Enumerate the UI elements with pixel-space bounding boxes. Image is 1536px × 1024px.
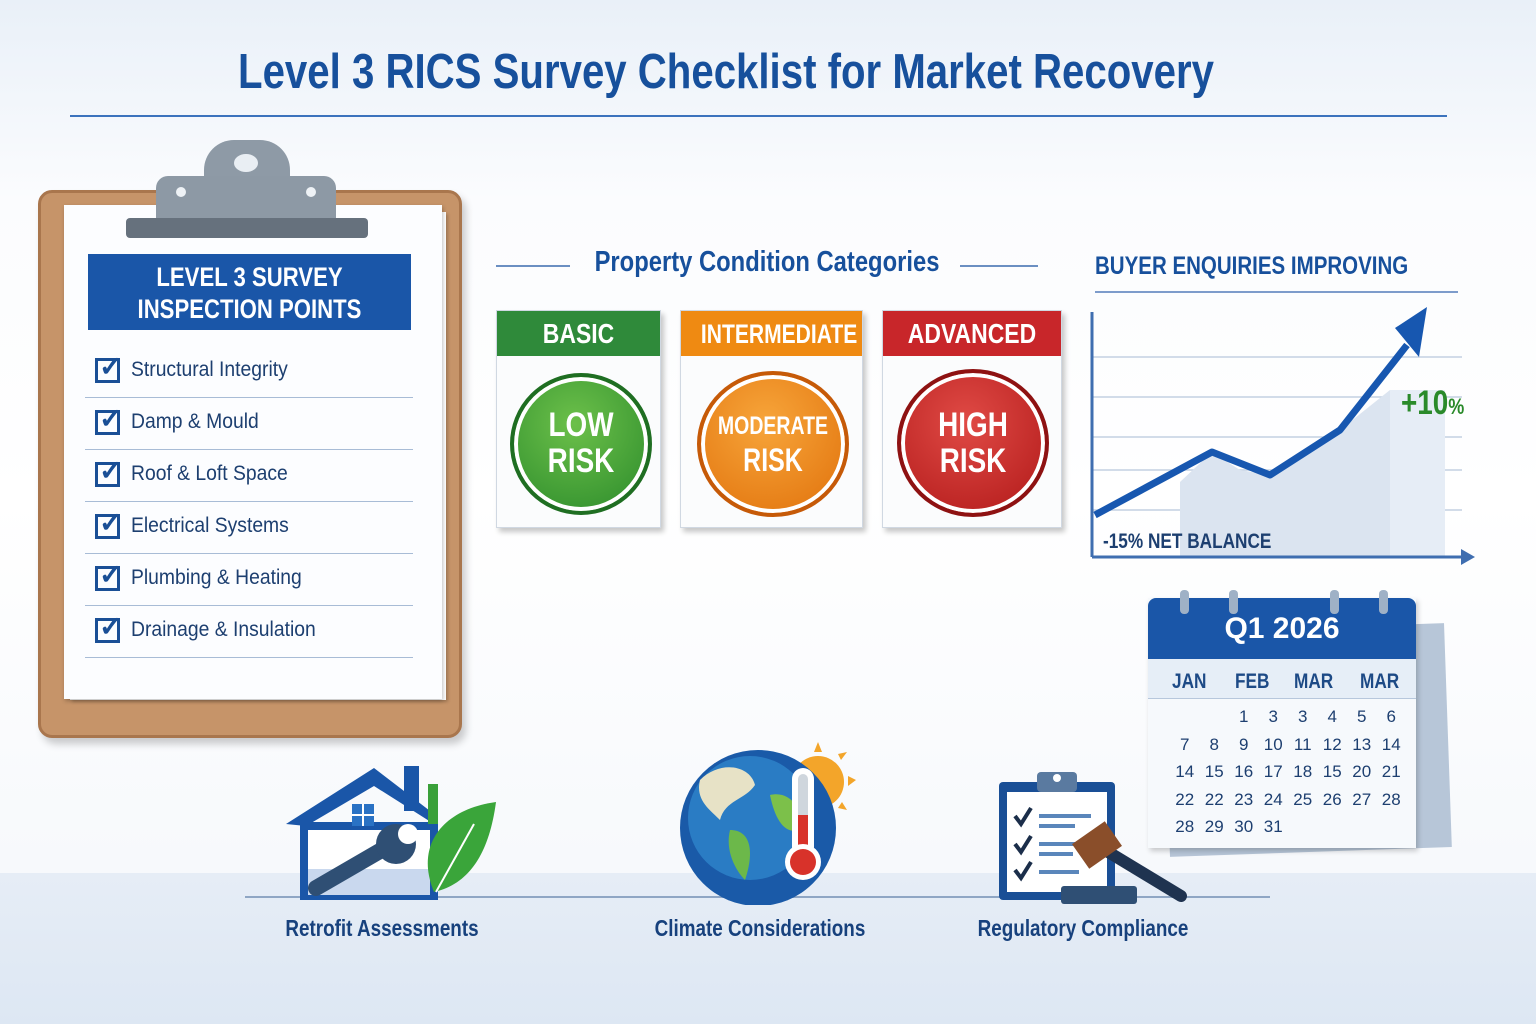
calendar: Q1 2026: 16: [1234, 762, 1253, 781]
calendar: Q1 2026: 7: [1180, 734, 1189, 754]
calendar: Q1 2026: 14: [1382, 734, 1401, 754]
label: regulatory compliance: Regulatory Compliance: [978, 915, 1188, 941]
calendar: Q1 2026: 9: [1239, 734, 1248, 754]
card: advanced high risk: HIGH: [938, 406, 1008, 444]
label: climate considerations: Climate Considerations: [655, 915, 865, 941]
label: net balance: -15% NET BALANCE: [1103, 530, 1271, 553]
calendar: Q1 2026: 22: [1205, 790, 1224, 808]
icon: climate globe: [680, 742, 856, 905]
card: intermediate moderate risk: [680, 310, 863, 528]
calendar: Q1 2026: 27: [1352, 790, 1371, 808]
card: advanced high risk: ADVANCED: [908, 318, 1036, 349]
card: advanced high risk: [882, 310, 1062, 528]
card: intermediate moderate risk: RISK: [743, 442, 803, 478]
calendar: Q1 2026: 28: [1382, 790, 1401, 808]
calendar: Q1 2026: 24: [1264, 790, 1283, 808]
calendar: Q1 2026: 20: [1352, 762, 1371, 781]
list: checklist items: ✓: [99, 351, 122, 382]
calendar: Q1 2026: 5: [1357, 707, 1366, 726]
card: intermediate moderate risk: MODERATE: [718, 412, 828, 440]
calendar: Q1 2026: 4: [1328, 707, 1337, 726]
list: checklist items: ✓: [99, 507, 122, 538]
label: +10%: +10%: [1401, 384, 1464, 422]
calendar: Q1 2026: 13: [1352, 734, 1371, 754]
calendar: Q1 2026: 18: [1293, 762, 1312, 781]
card: basic low risk: RISK: [548, 442, 614, 480]
heading: inspection points: INSPECTION POINTS: [138, 294, 361, 324]
chart: buyer enquiries improving: BUYER ENQUIRIES IMPROVING: [1095, 252, 1408, 280]
calendar: Q1 2026: 1: [1239, 707, 1248, 726]
list: checklist items: Electrical Systems: [131, 514, 289, 537]
calendar: Q1 2026: 3: [1298, 707, 1307, 726]
card: advanced high risk: RISK: [940, 442, 1006, 480]
calendar: Q1 2026: 26: [1323, 790, 1342, 808]
list: checklist items: ✓: [99, 559, 122, 590]
panel: clipboard checklist: [38, 140, 470, 748]
icon: regulatory clipboard and gavel: [999, 772, 1187, 904]
calendar: Q1 2026: 6: [1387, 707, 1396, 726]
calendar: Q1 2026: MAR: [1294, 670, 1333, 693]
calendar: Q1 2026: 23: [1234, 790, 1253, 808]
calendar: Q1 2026: 31: [1264, 817, 1283, 836]
calendar: Q1 2026: 17: [1264, 762, 1283, 781]
card: basic low risk: BASIC: [543, 318, 614, 349]
calendar: Q1 2026: 15: [1205, 762, 1224, 781]
chart: buyer enquiries improving: [1090, 252, 1475, 565]
calendar: Q1 2026: 28: [1175, 817, 1194, 836]
icon: retrofit house: [286, 766, 496, 900]
calendar: Q1 2026: 29: [1205, 817, 1224, 836]
bottom band: [0, 873, 1536, 1024]
calendar: Q1 2026: 15: [1323, 762, 1342, 781]
calendar: Q1 2026: 10: [1264, 734, 1283, 754]
list: checklist items: Roof & Loft Space: [131, 462, 288, 485]
calendar: Q1 2026: 14: [1175, 762, 1194, 781]
calendar: Q1 2026: 11: [1294, 734, 1312, 754]
calendar: Q1 2026: 3: [1269, 707, 1278, 726]
list: checklist items: Structural Integrity: [131, 358, 288, 381]
list: checklist items: ✓: [99, 455, 122, 486]
heading: inspection points: [88, 254, 411, 330]
calendar: Q1 2026: 25: [1293, 790, 1312, 808]
card: basic low risk: LOW: [548, 406, 614, 444]
calendar: Q1 2026: 30: [1234, 817, 1253, 836]
list: checklist items: Plumbing & Heating: [131, 566, 302, 589]
calendar: Q1 2026: 22: [1175, 790, 1194, 808]
calendar: Q1 2026: 8: [1210, 734, 1219, 754]
label: retrofit assessments: Retrofit Assessments: [285, 915, 479, 941]
calendar: Q1 2026: [1148, 590, 1452, 857]
calendar: Q1 2026: MAR: [1360, 670, 1399, 693]
calendar: Q1 2026: FEB: [1235, 670, 1269, 693]
calendar: Q1 2026: Q1 2026: [1224, 612, 1340, 645]
list: checklist items: Damp & Mould: [131, 410, 259, 433]
list: checklist items: [85, 351, 413, 658]
heading: inspection points: LEVEL 3 SURVEY: [156, 262, 343, 292]
icon: clip: [126, 140, 368, 238]
list: checklist items: ✓: [99, 611, 122, 642]
heading: property condition categories: Property Condition Categories: [595, 246, 939, 278]
calendar: Q1 2026: 21: [1382, 762, 1401, 781]
list: checklist items: ✓: [99, 403, 122, 434]
card: intermediate moderate risk: INTERMEDIATE: [701, 319, 857, 349]
calendar: Q1 2026: 12: [1323, 734, 1342, 754]
list: checklist items: Drainage & Insulation: [131, 618, 316, 641]
title: Level 3 RICS Survey Checklist for Market Recovery: [238, 45, 1214, 99]
card: basic low risk: [496, 310, 661, 528]
calendar: Q1 2026: JAN: [1172, 670, 1206, 693]
